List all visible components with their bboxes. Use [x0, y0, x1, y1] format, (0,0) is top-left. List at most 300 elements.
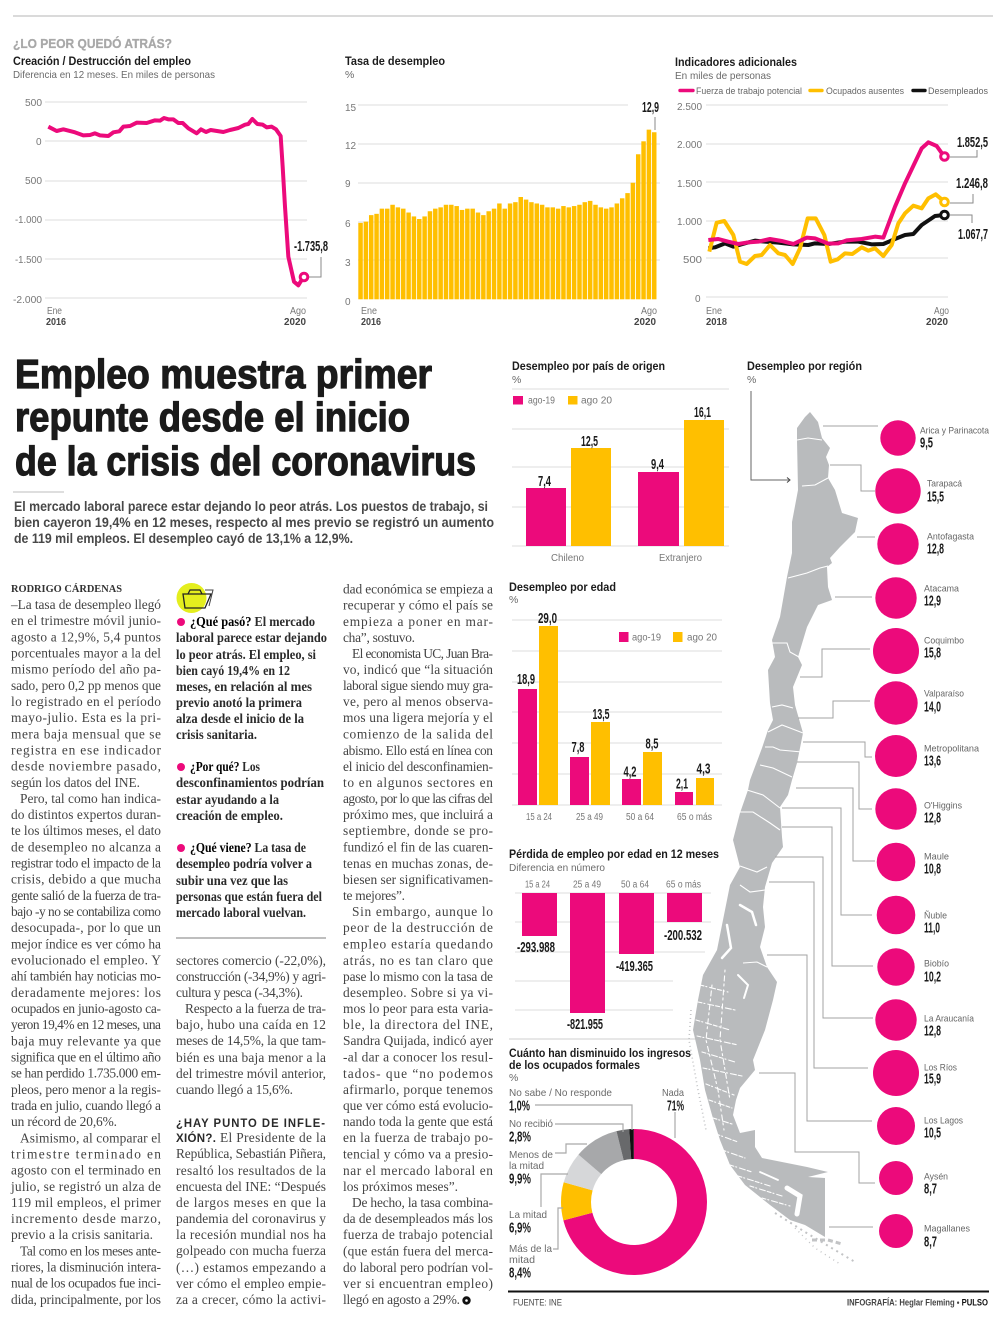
- region: Los Ríos: Los Ríos: [924, 1062, 957, 1074]
- heading: creación / destrucción: Creación / Destrucción del empleo: [13, 54, 191, 68]
- labels: donut: 2,8%: [509, 1128, 531, 1146]
- article column 2: bajo, hubo una caída en 12: [176, 1017, 326, 1032]
- legend: ago 20: [581, 396, 612, 406]
- article column 2: cuando llegó a 15,6%.: [176, 1082, 293, 1097]
- callout: qué pasó, por qué, qué viene: meses, en relación al mes: [176, 679, 312, 694]
- title: de la crisis del coronavirus: [15, 438, 476, 484]
- region: Maule: Maule: [924, 852, 949, 862]
- labels: donut: 1,0%: [509, 1098, 530, 1114]
- article column 3: (que están fuera del merca-: [343, 1244, 493, 1258]
- axis labels: Ago: [641, 306, 657, 317]
- article column 1: julio, se registró un alza de: [10, 1179, 161, 1194]
- bars: 25 a 49: [570, 706, 610, 823]
- unit: %: [747, 374, 756, 386]
- article column 1: en el trimestre móvil junio-: [11, 613, 161, 628]
- article column 1: crisis, debido a que mucha: [11, 872, 161, 887]
- labels: donut: 71%: [667, 1098, 684, 1114]
- axis labels: 15: [345, 103, 357, 114]
- article column 2: construcción (-34,9%) y agri-: [176, 969, 326, 984]
- article column 3: recuperar y cómo el país se: [343, 598, 493, 612]
- region: La Araucanía: 12,8: [924, 1022, 941, 1040]
- region: Atacama: [875, 577, 960, 619]
- region: Magallanes: 8,7: [924, 1234, 937, 1250]
- axis labels: 2.000: [677, 140, 702, 151]
- labels: donut: Menos de: [509, 1149, 553, 1161]
- region: Metropolitana: Metropolitana: [924, 744, 980, 754]
- region: Coquimbo: [873, 628, 964, 674]
- article column 1: porcentuales mayor a la del: [11, 646, 161, 660]
- article column 3: mos lo peor para esta varia-: [343, 1001, 493, 1016]
- article column 3: El economista UC, Juan Bra-: [352, 646, 493, 661]
- bars: chileno: [526, 433, 611, 564]
- article column 3: fuerza de trabajo potencial: [343, 1227, 493, 1242]
- bars: pérdida: [522, 893, 702, 1013]
- panel: indicadores adicionales: [675, 55, 988, 328]
- bars: 50 a 64: 8,5: [646, 736, 658, 752]
- region: Magallanes: [879, 1214, 970, 1250]
- labels: donut: Nada: [662, 1087, 684, 1099]
- article column 3: Sandra Quijada, indicó ayer: [343, 1033, 494, 1048]
- panel: desempleo por país de origen: [512, 359, 729, 564]
- labels: donut: La mitad: [509, 1209, 547, 1221]
- unit: %: [509, 594, 518, 606]
- labels: donut: 6,9%: [509, 1220, 531, 1236]
- axis labels: -1.000: [15, 215, 42, 226]
- heading: tasa de desempleo: Tasa de desempleo: [345, 54, 445, 68]
- region: Los Lagos: 10,5: [924, 1124, 941, 1142]
- article column 2: ¿HAY PUNTO DE INFLE-: [176, 1118, 326, 1130]
- bars: 65 o más: 4,3: [696, 760, 710, 778]
- legend: ago-19: [632, 632, 661, 644]
- article column 3: to en algunos sectores en: [343, 775, 493, 790]
- article column 3: De hecho, la tasa combina-: [352, 1195, 493, 1210]
- legend: ago 20: [687, 632, 717, 644]
- callout: -1.735,8: [294, 238, 328, 281]
- category labels: 25 a 49: [573, 880, 601, 890]
- callout: qué pasó, por qué, qué viene: laboral parece estar dejando: [176, 630, 327, 645]
- article column 3: ve, pero al menos observa-: [343, 694, 493, 709]
- article column 2: bién es una baja menor a la: [176, 1050, 326, 1065]
- article column 3: ble, la directora del INE,: [343, 1017, 493, 1032]
- article column 1: ocupados en junio-agosto ca-: [11, 1001, 161, 1016]
- bars: 25 a 49: 7,8: [572, 739, 584, 756]
- article column 3: nando toda la gente que está: [343, 1114, 493, 1129]
- article column 1: te los últimos meses, el dato: [11, 823, 161, 838]
- callout: qué pasó, por qué, qué viene: lo peor atrás. El empleo, si: [176, 647, 316, 662]
- callout: qué pasó, por qué, qué viene: estar ayudando a la: [176, 792, 279, 807]
- axis labels: Ene: [361, 306, 377, 317]
- legend: ago-19: [528, 396, 555, 406]
- labels: donut: 9,9%: [509, 1170, 531, 1188]
- region: Tarapacá: [875, 468, 963, 514]
- article column 1: un récord de 20,6%.: [11, 1114, 117, 1129]
- region: Ñuble: [877, 896, 947, 936]
- region: Maule: [877, 843, 949, 881]
- bars: chileno: 12,5: [581, 433, 598, 450]
- article column 1: evolucionado el empleo. Y: [11, 952, 161, 968]
- title: repunte desde el inicio: [15, 394, 410, 440]
- bars: 50 a 64: 4,2: [624, 764, 636, 780]
- article column 3: [343, 582, 494, 1307]
- article column 1: se han perdido 1.735.000 em-: [11, 1066, 161, 1081]
- article column 2: ver cómo el empleo empie-: [176, 1276, 326, 1291]
- article column 2: XIÓN?. El Presidente de la: [176, 1130, 326, 1145]
- bars: 25 a 49: 25 a 49: [576, 812, 603, 823]
- subtitle: indicadores: En miles de personas: [675, 70, 771, 82]
- article column 2: la recesión mundial nos ha: [176, 1227, 326, 1242]
- article column 1: trada en julio, cuando llegó a: [11, 1098, 161, 1113]
- axis labels: 2020: [634, 317, 656, 328]
- bars: chileno: 7,4: [538, 473, 551, 490]
- region: Antofagasta: Antofagasta: [927, 532, 975, 542]
- labels: donut: la mitad: [509, 1160, 544, 1172]
- unit: %: [509, 1072, 518, 1084]
- article column 3: fundizó el fin de las cuaren-: [343, 840, 493, 854]
- article column 1: riores, la disminución intera-: [11, 1260, 161, 1275]
- article column 2: za a crecer, cómo la activi-: [176, 1292, 326, 1307]
- callout: qué pasó, por qué, qué viene: bien cayó 19,4% en 12: [176, 663, 290, 678]
- article column 1: do distintos expertos duran-: [11, 807, 161, 822]
- article column 3: nar el mercado laboral en: [343, 1163, 493, 1178]
- article column 3: ver si encuentran empleo): [343, 1276, 493, 1291]
- article column 1: nual de los ocupados fue inci-: [11, 1276, 161, 1291]
- article column 1: agosto a 12,9%, 5,4 puntos: [11, 629, 161, 644]
- bars: 50 a 64: 50 a 64: [626, 812, 654, 823]
- article column 3: atrás, no es tan claro que: [343, 953, 493, 968]
- region: Arica y Parinacota: 9,5: [920, 434, 933, 452]
- donut chart: [576, 1144, 692, 1260]
- legend: indicadores: Desempleados: [928, 86, 988, 96]
- category labels: 65 o más: [666, 880, 701, 890]
- article column 3: tencial y cómo va a presio-: [343, 1146, 493, 1162]
- axis labels: Ene: [706, 306, 722, 317]
- callout: qué pasó, por qué, qué viene: personas que están fuera del: [176, 889, 322, 904]
- unit: %: [512, 374, 521, 386]
- region: Antofagasta: [877, 523, 975, 565]
- article column 3: pase lo mismo con la tasa de: [343, 969, 493, 984]
- article column 1: según los datos del INE.: [11, 775, 140, 790]
- article column 2: pandemia del coronavirus y: [176, 1211, 326, 1226]
- bullet: por qué: [177, 763, 185, 771]
- deck text: [14, 499, 494, 546]
- article column 3: cha”, sostuvo.: [343, 630, 415, 645]
- byline: RODRIGO CÁRDENAS: [11, 583, 122, 595]
- value labels: -821.955: [567, 1016, 603, 1033]
- axis labels: 6: [345, 219, 351, 230]
- callout: 12,9: [642, 99, 659, 130]
- article column 3: empieza a poner en mar-: [343, 614, 493, 629]
- subtitle: creación / destrucción: Diferencia en 12 meses. En miles de personas: [13, 69, 215, 81]
- bars: 15 a 24: [517, 610, 558, 823]
- labels: donut: 8,4%: [509, 1264, 531, 1282]
- value labels: -200.532: [664, 927, 702, 944]
- article column 3: Sin embargo, aunque lo: [352, 904, 493, 919]
- article column 2: sectores comercio (-22,0%),: [176, 953, 326, 968]
- region: Arica y Parinacota: Arica y Parinacota: [920, 426, 990, 436]
- heading: ingresos: Cuánto han disminuido los ingresos: [509, 1046, 691, 1060]
- region: Coquimbo: Coquimbo: [924, 636, 964, 646]
- article column 2: Respecto a la fuerza de tra-: [185, 1001, 326, 1016]
- callout: qué pasó, por qué, qué viene: crisis sanitaria.: [176, 727, 257, 742]
- article column 1: significa que en el último año: [11, 1050, 161, 1064]
- article column 1: bajo -y no se contabiliza como: [11, 904, 161, 919]
- article column 3: mos una ligera mejoría y el: [343, 710, 493, 725]
- article column 2: golpeado con mucha fuerza: [176, 1243, 326, 1258]
- axis labels: 1.000: [677, 217, 702, 228]
- article column 1: deradamente mejores: los: [11, 985, 161, 1000]
- region: Atacama: 12,9: [924, 592, 941, 610]
- article column 2: encuesta del INE: “Después: [176, 1179, 326, 1194]
- article column 1: mejor índice es ver cómo ha: [11, 936, 161, 951]
- axis labels: 0: [36, 137, 42, 148]
- axis labels: -2.000: [13, 295, 42, 306]
- fjords: [696, 905, 800, 1214]
- article column 1: mismo período del año pa-: [11, 662, 161, 677]
- bars: 65 o más: 2,1: [676, 776, 688, 792]
- category labels: [525, 880, 701, 890]
- heading: por edad: Desempleo por edad: [509, 580, 616, 594]
- bars: extranjero: 9,4: [651, 456, 664, 473]
- axis labels: 0: [345, 297, 351, 308]
- article column 1: Tal como en los meses ante-: [20, 1243, 161, 1258]
- islets: [689, 1010, 855, 1264]
- article column 1: mera baja mensual que se: [11, 726, 161, 741]
- bars: 15 a 24: 15 a 24: [526, 812, 552, 823]
- icon: end mark: [462, 1296, 471, 1305]
- article column 3: comienzo de la salida del: [343, 726, 493, 742]
- bars: 25 a 49: 13,5: [592, 706, 610, 723]
- callout: qué pasó, por qué, qué viene: creación de empleo.: [176, 808, 283, 823]
- panel: cuánto han disminuido los ingresos: [509, 1046, 692, 1282]
- map: Chile: [689, 412, 858, 1264]
- legend: indicadores: Ocupados ausentes: [826, 86, 904, 96]
- callout: qué pasó, por qué, qué viene: ¿Qué pasó? El mercado: [190, 614, 315, 629]
- region: Los Ríos: 15,9: [924, 1070, 941, 1088]
- panel: creación / destrucción del empleo: [13, 54, 328, 328]
- credit: INFOGRAFÍA: Heglar Fleming • PULSO: [847, 1298, 988, 1308]
- panel: desempleo por edad: [509, 580, 722, 823]
- article column 2: cultura y pesca (-34,3%).: [176, 985, 303, 1000]
- axis labels: 500: [25, 98, 42, 109]
- source: FUENTE: INE: [513, 1298, 562, 1308]
- axis labels: 0: [695, 294, 701, 305]
- article column 3: tados- que “no podemos: [343, 1066, 493, 1081]
- axis labels: 2016: [361, 317, 381, 328]
- axis labels: 1.500: [677, 179, 702, 190]
- callout: qué pasó, por qué, qué viene: desempleo podría volver a: [176, 856, 312, 871]
- region: Biobío: [877, 948, 949, 986]
- region: Maule: 10,8: [924, 860, 941, 878]
- region: Valparaíso: Valparaíso: [924, 688, 964, 700]
- article column 3: próximo mes, que incluirá a: [343, 807, 493, 822]
- article column 1: incremento desde marzo,: [11, 1211, 161, 1226]
- deck text: El mercado laboral parece estar dejando lo peor atrás. Los puestos de trabajo, si: [14, 499, 488, 514]
- axis labels: 9: [345, 179, 351, 190]
- region: Ñuble: 11,0: [924, 920, 940, 936]
- region: Aysén: Aysén: [924, 1172, 948, 1182]
- callout: qué pasó, por qué, qué viene: ¿Por qué? Los: [190, 759, 260, 774]
- unit: %: [345, 69, 354, 81]
- article column 1: 119 mil empleos, el primer: [11, 1195, 162, 1210]
- article column 3: septiembre, donde se pro-: [343, 823, 493, 838]
- connector lines: [535, 1105, 675, 1249]
- connector lines: regions: [759, 426, 878, 1227]
- region: Aysén: [879, 1161, 948, 1198]
- bars: extranjero: [638, 404, 724, 564]
- region: La Araucanía: La Araucanía: [924, 1014, 975, 1024]
- article column 2: (…) estamos empezando a: [176, 1260, 326, 1275]
- article column 3: dad económica se empieza a: [343, 582, 493, 596]
- category labels: 50 a 64: [621, 880, 649, 890]
- legend: [513, 396, 612, 406]
- category labels: 15 a 24: [525, 880, 550, 890]
- region: Aysén: 8,7: [924, 1180, 937, 1198]
- region: Tarapacá: Tarapacá: [927, 478, 963, 490]
- heading: país de origen: Desempleo por país de origen: [512, 359, 665, 373]
- article column 3: -al dar a conocer los resul-: [343, 1050, 493, 1064]
- labels: donut: Más de la: [509, 1243, 552, 1255]
- article column 2: meses de 14,5%, la que tam-: [176, 1033, 326, 1048]
- region: Los Lagos: [877, 1107, 963, 1145]
- article column 1: lo registrado en el período: [11, 694, 161, 709]
- article column 2: resaltó los resultados de la: [176, 1163, 326, 1178]
- bars: 50 a 64: [622, 736, 662, 823]
- region: Biobío: 10,2: [924, 968, 941, 986]
- axis labels: Ago: [290, 306, 306, 317]
- article column 1: Asimismo, al comparar el: [20, 1130, 161, 1145]
- axis labels: [677, 102, 949, 328]
- axis labels: Ene: [47, 306, 62, 317]
- region: Los Lagos: Los Lagos: [924, 1116, 963, 1126]
- subtitle: pérdida: Diferencia en número: [509, 862, 605, 874]
- article column 3: da de desempleados más los: [343, 1211, 493, 1226]
- article column 1: sado, pero 0,2 pp menos que: [11, 678, 161, 693]
- axis labels: 2020: [284, 317, 306, 328]
- article column 3: que ver cómo está evolucio-: [343, 1098, 493, 1113]
- axis labels: 500: [683, 255, 702, 266]
- article column 2: de largos meses en que la: [176, 1195, 326, 1210]
- bars: extranjero: Extranjero: [659, 553, 702, 564]
- region: Atacama: Atacama: [924, 584, 960, 594]
- article column 1: de desempleo no alcanza a: [11, 839, 161, 854]
- article column 1: desocupada-, por lo que un: [11, 920, 161, 935]
- line chart: indicadores: [708, 142, 944, 264]
- article column 3: agosto, por lo que las cifras del: [343, 791, 493, 806]
- heading: desempleo por región: Desempleo por región: [747, 359, 862, 373]
- article column 1: ahí también hay noticias mo-: [11, 969, 161, 984]
- axis labels: 12: [345, 141, 357, 152]
- axis labels: 3: [345, 258, 351, 269]
- article column 1: [10, 597, 162, 1307]
- labels: donut: No recibió: [509, 1118, 553, 1130]
- region: O'Higgins: O'Higgins: [924, 800, 962, 812]
- region: Valparaíso: 14,0: [924, 698, 941, 716]
- heading: indicadores adicionales: Indicadores adicionales: [675, 55, 797, 69]
- axis labels: [13, 98, 306, 328]
- callout: qué pasó, por qué, qué viene: previo anotó la primera: [176, 695, 302, 710]
- region: Ñuble: Ñuble: [924, 910, 947, 922]
- axis labels: -1.500: [15, 255, 42, 266]
- article column 3: en la fuerza de trabajo po-: [343, 1130, 493, 1145]
- value labels: -293.988: [517, 939, 555, 956]
- labels: donut: [509, 1087, 684, 1282]
- article column 1: desde noviembre pasado,: [11, 759, 161, 774]
- article column 3: el inicio del desconfinamien-: [343, 759, 493, 774]
- bullet: qué pasó: [177, 618, 185, 626]
- bars: chileno: Chileno: [551, 553, 584, 564]
- article column 3: peor de la destrucción de: [343, 920, 493, 935]
- region: Antofagasta: 12,8: [927, 540, 944, 558]
- panel: pérdida de empleo por edad: [509, 847, 719, 1033]
- article column 1: mayo-julio. Esta es la pri-: [11, 710, 161, 725]
- article column 1: pleos, pero menor a la regis-: [11, 1082, 161, 1097]
- article column 1: agosto con el terminado en: [11, 1163, 161, 1178]
- legend: indicadores: Fuerza de trabajo potencial: [696, 86, 802, 96]
- axis labels: 2018: [706, 317, 727, 328]
- callout: qué pasó, por qué, qué viene: mercado laboral vuelvan.: [176, 905, 306, 920]
- region: Valparaíso: [874, 681, 964, 725]
- article column 1: trimestre terminado en: [11, 1146, 161, 1161]
- article column 3: vo, indicó que “la situación: [343, 662, 493, 677]
- article column 1: baja muy relevante ya que: [11, 1033, 161, 1048]
- callout: qué pasó, por qué, qué viene: [176, 614, 327, 920]
- article column 3: los próximos meses”.: [343, 1179, 458, 1194]
- article column 2: [176, 953, 326, 1307]
- deck text: bien cayeron 19,4% en 12 meses, respecto al mes previo se registró un aumento: [14, 515, 494, 530]
- bar chart: tasa mensual: [358, 130, 656, 299]
- icon: briefcase on yellow circle: [176, 583, 213, 613]
- section heading: ¿LO PEOR QUEDÓ ATRÁS?: [13, 36, 172, 51]
- callout: -1.735,8: -1.735,8: [294, 238, 328, 255]
- title: Empleo muestra primer: [15, 351, 432, 397]
- value labels: -419.365: [616, 958, 653, 975]
- article column 3: tenas en muchas zonas, de-: [343, 856, 493, 871]
- article column 3: laboral sigue siendo muy gra-: [343, 678, 493, 693]
- heading: ingresos: [509, 1046, 691, 1072]
- region: Metropolitana: 13,6: [924, 752, 941, 770]
- article column 3: do laboral pero podrían vol-: [343, 1260, 493, 1275]
- callouts: indicadores: [941, 134, 988, 243]
- axis labels: 2020: [926, 317, 948, 328]
- region: Metropolitana: [875, 735, 980, 777]
- labels: donut: mitad: [509, 1254, 535, 1266]
- bars: 65 o más: [675, 760, 714, 823]
- region: La Araucanía: [875, 999, 975, 1041]
- article column 1: dida, principalmente, por los: [11, 1292, 161, 1307]
- legend: indicadores: [680, 86, 988, 96]
- article column 3: afirmarlo, porque tenemos: [343, 1082, 493, 1097]
- article column 3: desempleo. Sobre si ya vi-: [343, 985, 493, 1000]
- deck text: de 119 mil empleos. El desempleo cayó de 13,1% a 12,9%.: [14, 531, 353, 546]
- bars: 15 a 24: 29,0: [538, 610, 557, 627]
- article column 1: registra en ese indicador: [11, 742, 162, 757]
- labels: donut: No sabe / No responde: [509, 1087, 612, 1099]
- article column 1: –La tasa de desempleo llegó: [10, 597, 161, 612]
- callout: 12,9: 12,9: [642, 99, 659, 116]
- region: Biobío: Biobío: [924, 958, 949, 970]
- bars: extranjero: 16,1: [694, 404, 711, 421]
- callout: qué pasó, por qué, qué viene: alza desde el inicio de la: [176, 711, 304, 726]
- callout: qué pasó, por qué, qué viene: ¿Qué viene? La tasa de: [190, 840, 306, 855]
- region: O'Higgins: 12,8: [924, 810, 941, 826]
- region: Arica y Parinacota: [880, 420, 990, 456]
- heading: ingresos: de los ocupados formales: [509, 1058, 640, 1072]
- value labels: [517, 927, 702, 1033]
- article column 3: llegó en agosto a 29%.: [343, 1292, 460, 1307]
- callout: qué pasó, por qué, qué viene: subir una vez que las: [176, 873, 288, 888]
- region: Tarapacá: 15,5: [927, 488, 944, 506]
- article column 3: empleo estaría quedando: [343, 936, 493, 952]
